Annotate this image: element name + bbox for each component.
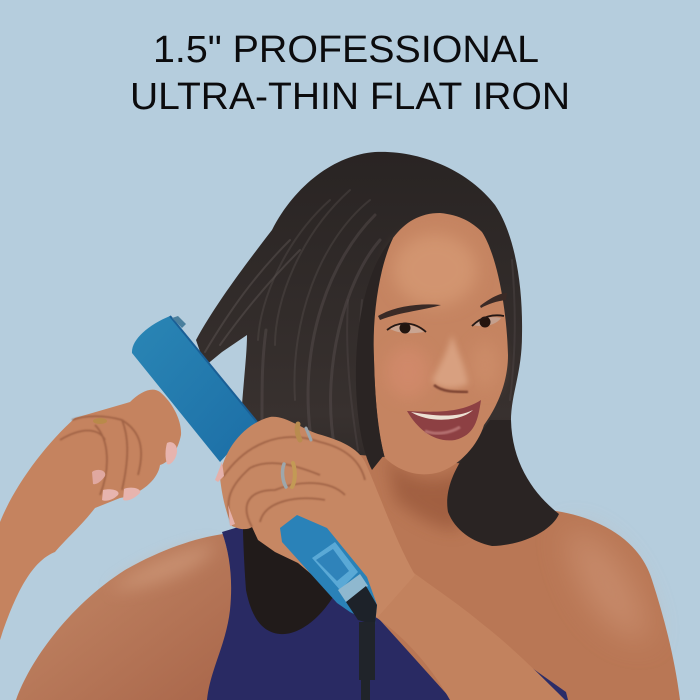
left hand finger lines: [60, 416, 141, 495]
shoulder highlight: [110, 545, 215, 590]
iron edge highlight: [170, 316, 257, 422]
nose shadow: [434, 385, 468, 392]
left fingernails: [166, 442, 177, 464]
title: [130, 29, 570, 118]
chest highlight: [565, 530, 650, 640]
iron hinge: [172, 316, 186, 328]
left eye: [390, 324, 424, 333]
cheek glow: [386, 346, 430, 398]
left shoulder and arm: [16, 534, 234, 700]
left hand: [0, 390, 181, 640]
torso and chest skin: [340, 455, 680, 700]
hair strands: [205, 190, 515, 450]
iron control panel: [312, 542, 358, 590]
hair framing face left: [356, 238, 393, 470]
left ring: [93, 418, 107, 424]
photo: woman styling hair: [0, 152, 680, 700]
right eye: [473, 317, 501, 326]
rings: [283, 424, 311, 487]
right forearm: [300, 470, 565, 700]
iron tip collar: [338, 574, 368, 602]
forehead glow: [393, 234, 477, 306]
mouth: [407, 400, 481, 440]
right eyebrow: [480, 293, 507, 308]
lower hair right of neck: [447, 420, 559, 546]
flat iron upper paddle: [132, 316, 257, 462]
lower hair over dress: [243, 480, 360, 634]
navy dress: [207, 525, 568, 700]
nose highlight: [432, 335, 468, 388]
neck shadow: [385, 450, 470, 530]
iron tip cap: [346, 586, 377, 625]
right cheek glow: [471, 341, 499, 389]
right hand fingernails: [215, 462, 224, 482]
left eyebrow: [378, 304, 441, 320]
hair back: [196, 152, 522, 590]
face: [374, 213, 508, 474]
title: 1.5" PROFESSIONAL: [153, 29, 539, 71]
iron lower handle: [280, 515, 377, 625]
right hand: [215, 417, 415, 618]
right hand finger lines: [223, 437, 365, 527]
flat iron handle: [280, 515, 377, 700]
title: ULTRA-THIN FLAT IRON: [130, 76, 570, 118]
power cord: [359, 622, 375, 700]
